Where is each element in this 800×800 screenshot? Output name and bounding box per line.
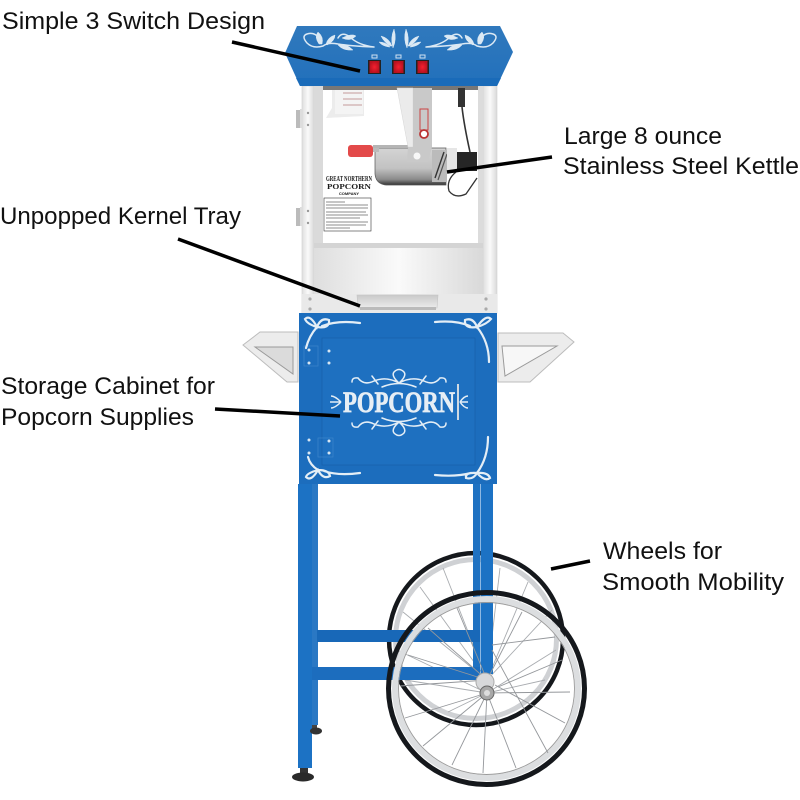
machine body <box>296 86 497 313</box>
kettle side latch <box>432 150 447 182</box>
front foot <box>292 768 314 782</box>
door handle <box>457 384 459 420</box>
red kettle handle <box>348 145 379 157</box>
label: kettle: Large 8 ounce <box>564 123 722 150</box>
label: wheels: Smooth Mobility <box>602 569 784 596</box>
lower rail <box>314 243 483 248</box>
lower hinge <box>296 207 309 226</box>
lower door hinge <box>308 438 333 457</box>
bracket arm <box>407 88 432 162</box>
corner scrollwork bottom left <box>306 457 360 478</box>
label: kettle: Stainless Steel Kettle <box>563 153 799 180</box>
kettle rim <box>373 145 413 148</box>
switch 1 <box>368 60 381 74</box>
label: kettle <box>563 123 799 180</box>
popcorn word: POPCORN <box>343 386 455 419</box>
corner scrollwork top right <box>435 318 491 362</box>
white kettle box <box>447 148 457 172</box>
unpopped kernel tray <box>357 295 438 310</box>
cart legs and crossbars <box>292 484 493 782</box>
brand logo: COMPANY <box>339 191 359 196</box>
switch 2 <box>392 60 405 74</box>
red label on bracket <box>420 109 428 130</box>
front left leg <box>298 484 312 768</box>
rear left leg <box>312 484 318 725</box>
no-touch sticker <box>420 130 428 138</box>
back foot <box>310 725 322 734</box>
label: cabinet: Storage Cabinet for <box>1 373 215 400</box>
popcorn leaf right <box>460 396 468 408</box>
base plate <box>302 294 497 313</box>
bracket hole <box>414 152 420 160</box>
upper door hinge <box>304 346 330 366</box>
leader line: kettle <box>447 157 552 172</box>
right post <box>483 86 497 313</box>
side shelves <box>243 332 574 382</box>
inner left post <box>314 86 323 243</box>
wheel hub <box>476 673 494 700</box>
warning label <box>324 198 371 231</box>
roof <box>285 26 513 86</box>
leader line: switches <box>232 42 360 71</box>
front wheel <box>388 592 584 784</box>
roof scrollwork left half <box>304 29 395 50</box>
cabinet door outline <box>322 338 475 465</box>
upper crossbar <box>317 630 480 642</box>
top rail <box>323 86 478 90</box>
popcorn flourish above <box>352 370 446 387</box>
upper hinge <box>296 109 309 128</box>
brand logo <box>326 174 372 196</box>
leader line: wheels <box>551 561 590 569</box>
left post <box>302 86 314 313</box>
corner scrollwork top left <box>305 318 360 348</box>
rivets <box>308 297 488 311</box>
label: kernel tray: Unpopped Kernel Tray <box>0 203 241 230</box>
roof scrollwork right half <box>405 29 496 50</box>
label: switch design: Simple 3 Switch Design <box>2 8 265 35</box>
storage cabinet <box>299 313 497 484</box>
front right leg <box>480 484 493 674</box>
bracket diagonal <box>397 88 413 147</box>
popcorn leaf left <box>330 396 341 408</box>
kettle and bracket <box>373 88 457 185</box>
leader line: kernel tray <box>178 239 360 306</box>
left shelf <box>243 332 298 382</box>
switch icons <box>372 55 425 58</box>
label: cabinet <box>1 373 215 431</box>
kettle pot <box>375 148 446 185</box>
label: wheels <box>602 538 784 596</box>
back wheel <box>389 553 563 725</box>
label: wheels: Wheels for <box>603 538 722 565</box>
switch 3 <box>416 60 429 74</box>
corner scrollwork bottom right <box>435 437 490 479</box>
rear right leg <box>473 484 480 674</box>
inner right post <box>478 86 483 243</box>
label: cabinet: Popcorn Supplies <box>1 404 194 431</box>
popcorn scoop box <box>326 90 364 118</box>
warming tray <box>314 248 483 295</box>
popcorn flourish below <box>352 418 446 436</box>
right shelf <box>498 333 574 382</box>
leader line: cabinet <box>215 409 340 416</box>
kettle motor and cord <box>448 88 477 196</box>
brand logo: POPCORN <box>327 182 372 191</box>
lower crossbar <box>312 667 480 680</box>
brand logo: GREAT NORTHERN <box>326 174 372 183</box>
